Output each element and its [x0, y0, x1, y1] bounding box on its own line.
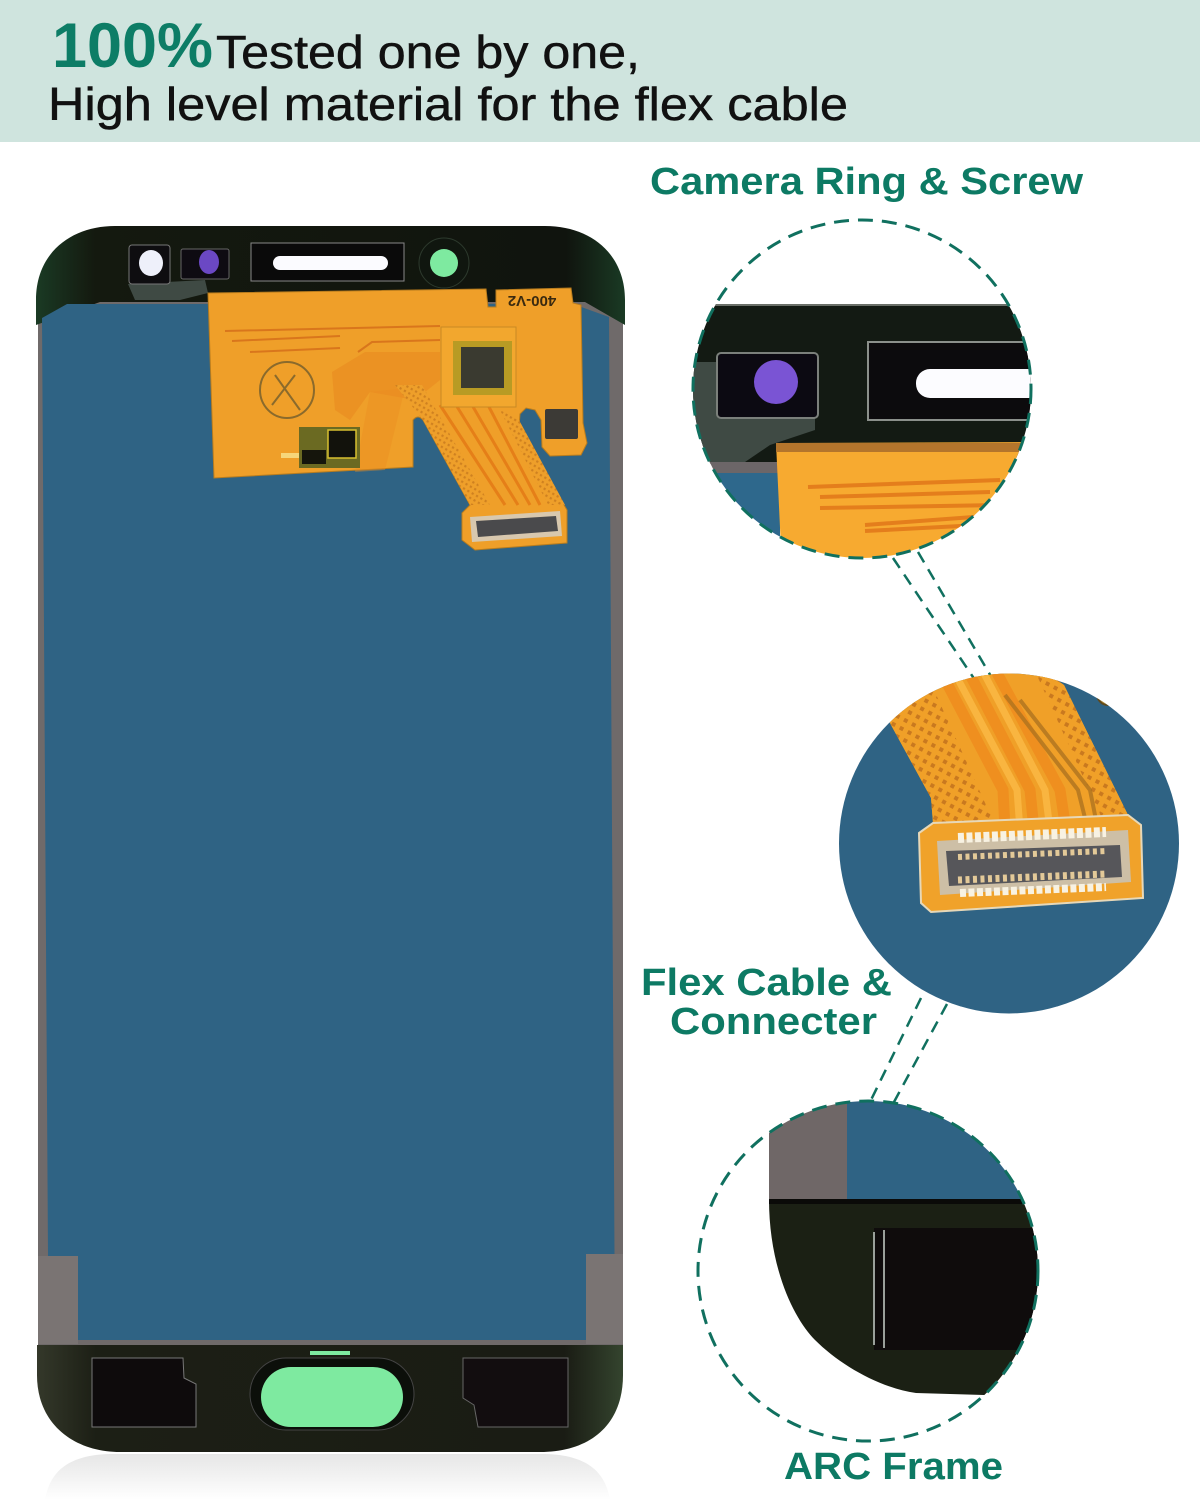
connector socket: [946, 845, 1122, 886]
board traces: [225, 326, 440, 352]
bottom pads: [960, 887, 1106, 893]
top pads: [958, 832, 1106, 838]
blue panel: [42, 304, 615, 1340]
front camera: [129, 245, 170, 284]
right speaker cutout: [463, 1358, 568, 1427]
small connector: [545, 409, 578, 439]
gray frame strip: [710, 462, 778, 473]
callout title: flex cable and connecter: [641, 962, 892, 1043]
gray frame section: [769, 1095, 847, 1201]
right mesh: [1037, 676, 1128, 816]
translucent tape band: [355, 388, 405, 472]
bottom black bezel: [37, 1345, 623, 1452]
headline: 100%: 100%: [52, 11, 213, 81]
reflection below phone: [45, 1454, 610, 1500]
phone frame: [38, 300, 623, 1350]
headline: high level material: High level material for the flex cable: [48, 78, 848, 130]
black line: [769, 1199, 1049, 1204]
header band: [0, 0, 1200, 142]
stamp mark: [260, 362, 314, 418]
dashed connector: camera to cable: [893, 552, 992, 680]
blue panel section: [847, 1101, 1020, 1199]
zoom circle: camera ring: [690, 220, 1046, 570]
fan region: [332, 352, 440, 420]
left cable mesh: [395, 385, 490, 505]
cable traces: [943, 674, 1070, 819]
speaker cutout: [874, 1228, 1049, 1350]
gray area under camera: [128, 280, 208, 300]
flex traces: [808, 480, 1000, 531]
callout title: ARC frame: ARC Frame: [784, 1446, 1003, 1488]
blue panel section: [717, 473, 780, 537]
orange flex: [776, 442, 1021, 558]
green sensor: [419, 238, 469, 288]
inner pads top: [958, 851, 1106, 857]
callout title: flex cable and connecter: Connecter: [670, 1001, 877, 1043]
inner pads bottom: [958, 874, 1106, 880]
gray left area: [690, 362, 815, 462]
home button: [250, 1351, 414, 1430]
dark trace: [1005, 695, 1098, 830]
white grille: [916, 369, 1031, 398]
sensor window: [181, 249, 229, 279]
connector frame: [937, 830, 1131, 895]
lower right gray tab: [586, 1254, 623, 1344]
left mesh: [890, 690, 990, 822]
headline: tested one by one: Tested one by one,: [216, 26, 640, 78]
earpiece: [251, 243, 404, 281]
controller chip: [441, 327, 516, 407]
cable traces: [440, 405, 540, 505]
version label: 400-V2: [508, 292, 556, 309]
phone LCD screen: [36, 226, 625, 1452]
zoom circle: ARC frame: [698, 1095, 1049, 1441]
lower left gray tab: [38, 1256, 78, 1344]
dashed connector: cable to frame: [870, 998, 947, 1102]
light stripes: [956, 674, 1052, 818]
cable body: [890, 674, 1128, 822]
lower blue panel: [78, 1250, 586, 1340]
main connector: [470, 511, 562, 542]
dark corner body: [769, 1199, 1045, 1400]
small IC patch: [281, 427, 360, 468]
top black bezel: [36, 226, 625, 325]
callout title: camera ring and screw: Camera Ring & Screw: [650, 161, 1083, 203]
camera window: [717, 353, 818, 418]
cutout highlight: [874, 1230, 884, 1348]
left speaker cutout: [92, 1358, 196, 1427]
zoom circle: flex cable connector: [839, 650, 1179, 1014]
earpiece window: [868, 342, 1038, 420]
corner object: [1096, 698, 1109, 706]
callout title: flex cable and connecter: Flex Cable &: [641, 962, 892, 1004]
flex board: [208, 288, 587, 550]
right cable mesh: [500, 410, 565, 505]
purple lens: [754, 360, 798, 404]
solder tab: [919, 815, 1143, 912]
